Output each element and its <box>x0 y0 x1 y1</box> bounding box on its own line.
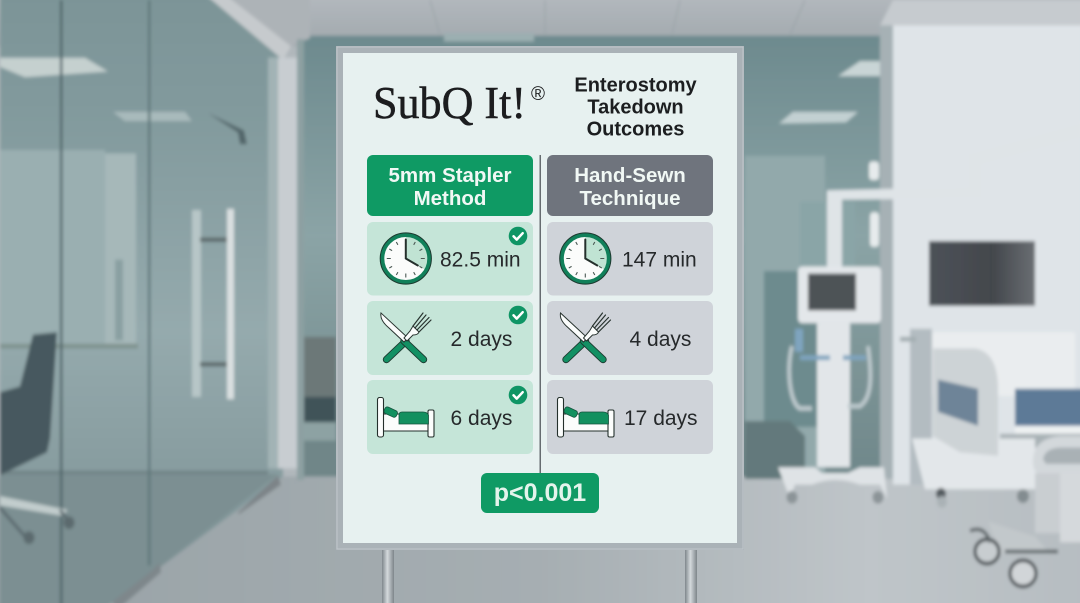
icon: knife and fork <box>381 313 431 360</box>
stapler row: length of stay <box>367 380 533 454</box>
icon: hospital bed <box>378 398 434 437</box>
column header: Hand-Sewn Technique <box>547 155 713 216</box>
stapler row: operative time: 82.5 min <box>440 248 521 272</box>
hand-sewn row: return to diet <box>547 301 713 375</box>
column header: 5mm Stapler Method: Method <box>414 187 486 210</box>
hand-sewn row: operative time: 147 min <box>622 248 697 272</box>
sign stand poles <box>382 548 697 603</box>
hand-sewn row: return to diet: 4 days <box>630 328 691 351</box>
hand-sewn row: length of stay <box>547 380 713 454</box>
logo: SubQ It!: ® <box>531 84 545 105</box>
title: Enterostomy Takedown Outcomes <box>574 74 697 140</box>
icon: knife and fork <box>560 313 610 360</box>
icon: hospital bed <box>558 398 614 437</box>
title: Enterostomy Takedown Outcomes: Takedown <box>587 96 684 118</box>
column header: Hand-Sewn Technique: Technique <box>580 187 680 210</box>
stapler row: return to diet <box>367 301 533 375</box>
column header: 5mm Stapler Method <box>367 155 533 216</box>
sign board <box>336 46 744 550</box>
column header: 5mm Stapler Method: 5mm Stapler <box>388 164 512 187</box>
icon: clock <box>560 233 611 284</box>
column header: Hand-Sewn Technique: Hand-Sewn <box>574 164 686 187</box>
p-value badge <box>481 473 599 513</box>
stapler row: length of stay: 6 days <box>450 407 512 430</box>
title: Enterostomy Takedown Outcomes: Enterostomy <box>574 74 697 96</box>
stapler row: return to diet: 2 days <box>450 328 512 351</box>
stapler row: operative time <box>367 222 533 296</box>
icon: clock <box>380 233 431 284</box>
title: Enterostomy Takedown Outcomes: Outcomes <box>587 118 684 140</box>
hand-sewn row: operative time <box>547 222 713 296</box>
icon: check mark <box>509 386 527 404</box>
hand-sewn row: length of stay: 17 days <box>624 407 698 430</box>
icon: check mark <box>509 306 527 324</box>
p-value badge: p<0.001 <box>494 479 586 507</box>
logo: SubQ It!: SubQ It! <box>373 77 526 128</box>
center divider <box>540 155 541 474</box>
icon: check mark <box>509 227 527 245</box>
